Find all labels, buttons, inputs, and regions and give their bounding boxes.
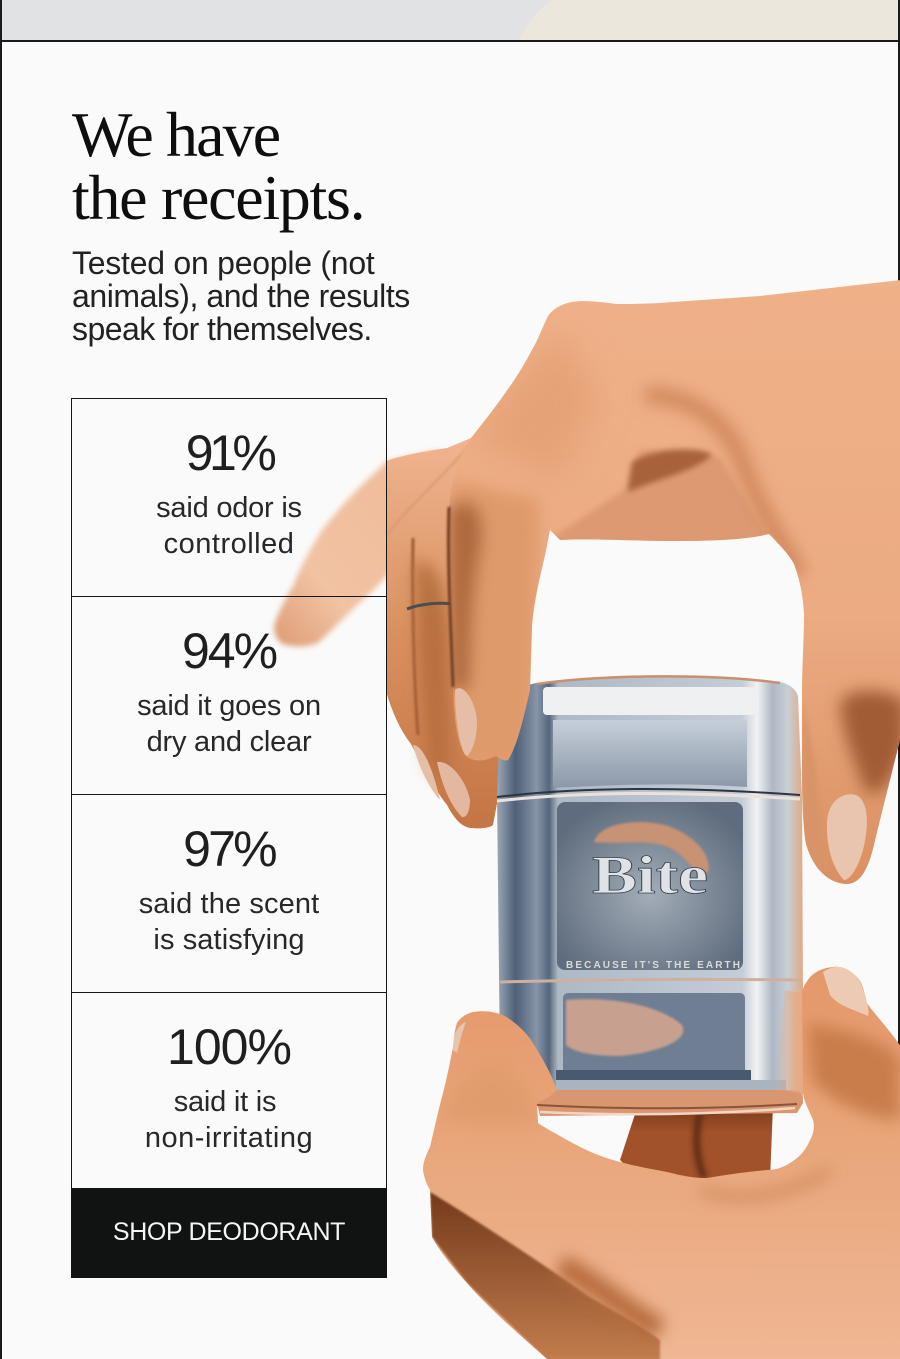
upper seam bbox=[497, 789, 800, 797]
finger shadow bbox=[415, 560, 450, 780]
lower hand dark fold bbox=[430, 1192, 660, 1359]
blurred pinky finger bbox=[274, 450, 440, 646]
top panel bbox=[553, 720, 747, 788]
reflection arc bbox=[594, 822, 709, 874]
centre panel bbox=[557, 802, 743, 970]
crease shading bbox=[645, 395, 800, 575]
stat: dry and clear: dry and clear bbox=[147, 726, 311, 758]
finger nail bbox=[453, 1022, 466, 1053]
button: shop deodorant: SHOP DEODORANT bbox=[113, 1218, 345, 1246]
lower reflection bbox=[566, 999, 683, 1056]
crease between index and ring finger bbox=[448, 507, 453, 687]
thumb edge shadow bbox=[802, 722, 828, 878]
copper base bbox=[537, 1090, 803, 1116]
fingers behind case at bottom bbox=[620, 1105, 773, 1185]
middle nail bbox=[437, 762, 470, 817]
fold shadow bbox=[560, 1265, 660, 1330]
heading: the receipts. bbox=[72, 162, 364, 233]
rim reflection right bbox=[775, 990, 803, 1093]
dark knuckle patch bbox=[840, 691, 900, 794]
heading bbox=[72, 99, 364, 233]
subheading: animals), and the results bbox=[72, 278, 410, 314]
underside of palm bbox=[554, 450, 766, 541]
finger crease bbox=[413, 538, 418, 735]
subheading: Tested on people (not bbox=[72, 245, 375, 281]
stat: odor: 91% bbox=[186, 425, 272, 481]
knuckle line bbox=[387, 445, 470, 535]
button: shop deodorant bbox=[71, 1188, 387, 1278]
finger side shading bbox=[439, 1098, 538, 1121]
stat: non-irritating bbox=[145, 1019, 313, 1154]
top strip bbox=[0, 0, 900, 42]
stat: dry and clear: 94% bbox=[182, 623, 276, 679]
index finger shadow bbox=[449, 502, 482, 690]
bottom dark band bbox=[556, 1070, 751, 1084]
logo: Bite bbox=[592, 845, 708, 905]
lower panel bbox=[563, 993, 745, 1075]
stat: non-irritating: non-irritating bbox=[145, 1122, 313, 1154]
stat: odor: controlled bbox=[164, 528, 294, 560]
lower hand bbox=[415, 960, 900, 1359]
stat: odor: said odor is bbox=[156, 492, 302, 524]
knuckle tone bbox=[471, 342, 593, 468]
tagline: BECAUSE IT'S THE EARTH bbox=[566, 960, 740, 971]
subheading: speak for themselves. bbox=[72, 311, 372, 347]
heading: We have bbox=[72, 99, 279, 170]
thumb shading bbox=[808, 1020, 900, 1120]
stat: dry and clear bbox=[72, 597, 386, 795]
stat: scent bbox=[72, 795, 386, 993]
subheading bbox=[72, 245, 410, 347]
stat: non-irritating: 100% bbox=[167, 1019, 291, 1075]
thumb nail bbox=[827, 794, 867, 880]
stat: non-irritating: said it is bbox=[174, 1086, 276, 1118]
index fingernail bbox=[455, 688, 477, 757]
stat: scent: is satisfying bbox=[153, 924, 305, 956]
deodorant case bbox=[497, 675, 803, 1116]
palm crease bbox=[700, 1170, 830, 1197]
middle and ring fingers bbox=[386, 438, 500, 828]
stat: scent: 97% bbox=[183, 821, 275, 877]
index finger tone bbox=[450, 480, 540, 760]
outer nail bbox=[413, 745, 440, 800]
band ring bbox=[407, 603, 454, 609]
rim highlight bbox=[537, 676, 780, 684]
panel: stats table bbox=[71, 398, 387, 1278]
palm top shadow bbox=[628, 450, 712, 492]
top highlight bbox=[543, 687, 755, 715]
upper hand bbox=[449, 280, 900, 884]
stat: odor bbox=[72, 399, 386, 597]
lower seam bbox=[500, 979, 800, 982]
lower thumb nail bbox=[823, 967, 869, 1016]
stat: dry and clear: said it goes on bbox=[137, 690, 321, 722]
stat: scent: said the scent bbox=[139, 888, 319, 920]
